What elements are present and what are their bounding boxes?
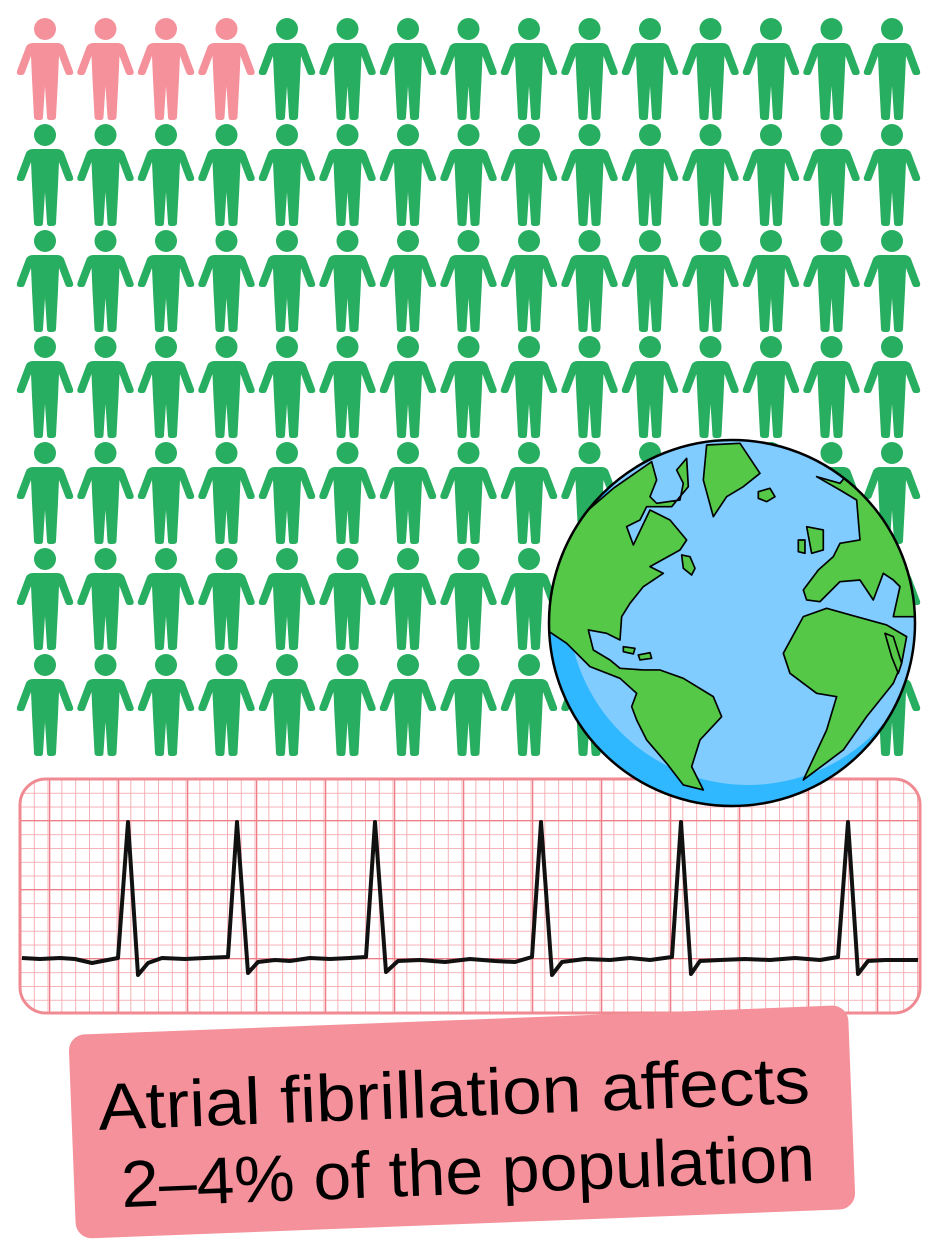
ECG strip [20,779,920,1013]
people grid [17,18,920,756]
callout: statistic label: Atrial fibrillation affects [97,1043,811,1144]
callout: statistic label: 2–4% of the population [120,1120,816,1221]
callout: statistic label [68,1005,856,1239]
icon: globe [547,425,937,806]
ECG trace [22,822,918,975]
